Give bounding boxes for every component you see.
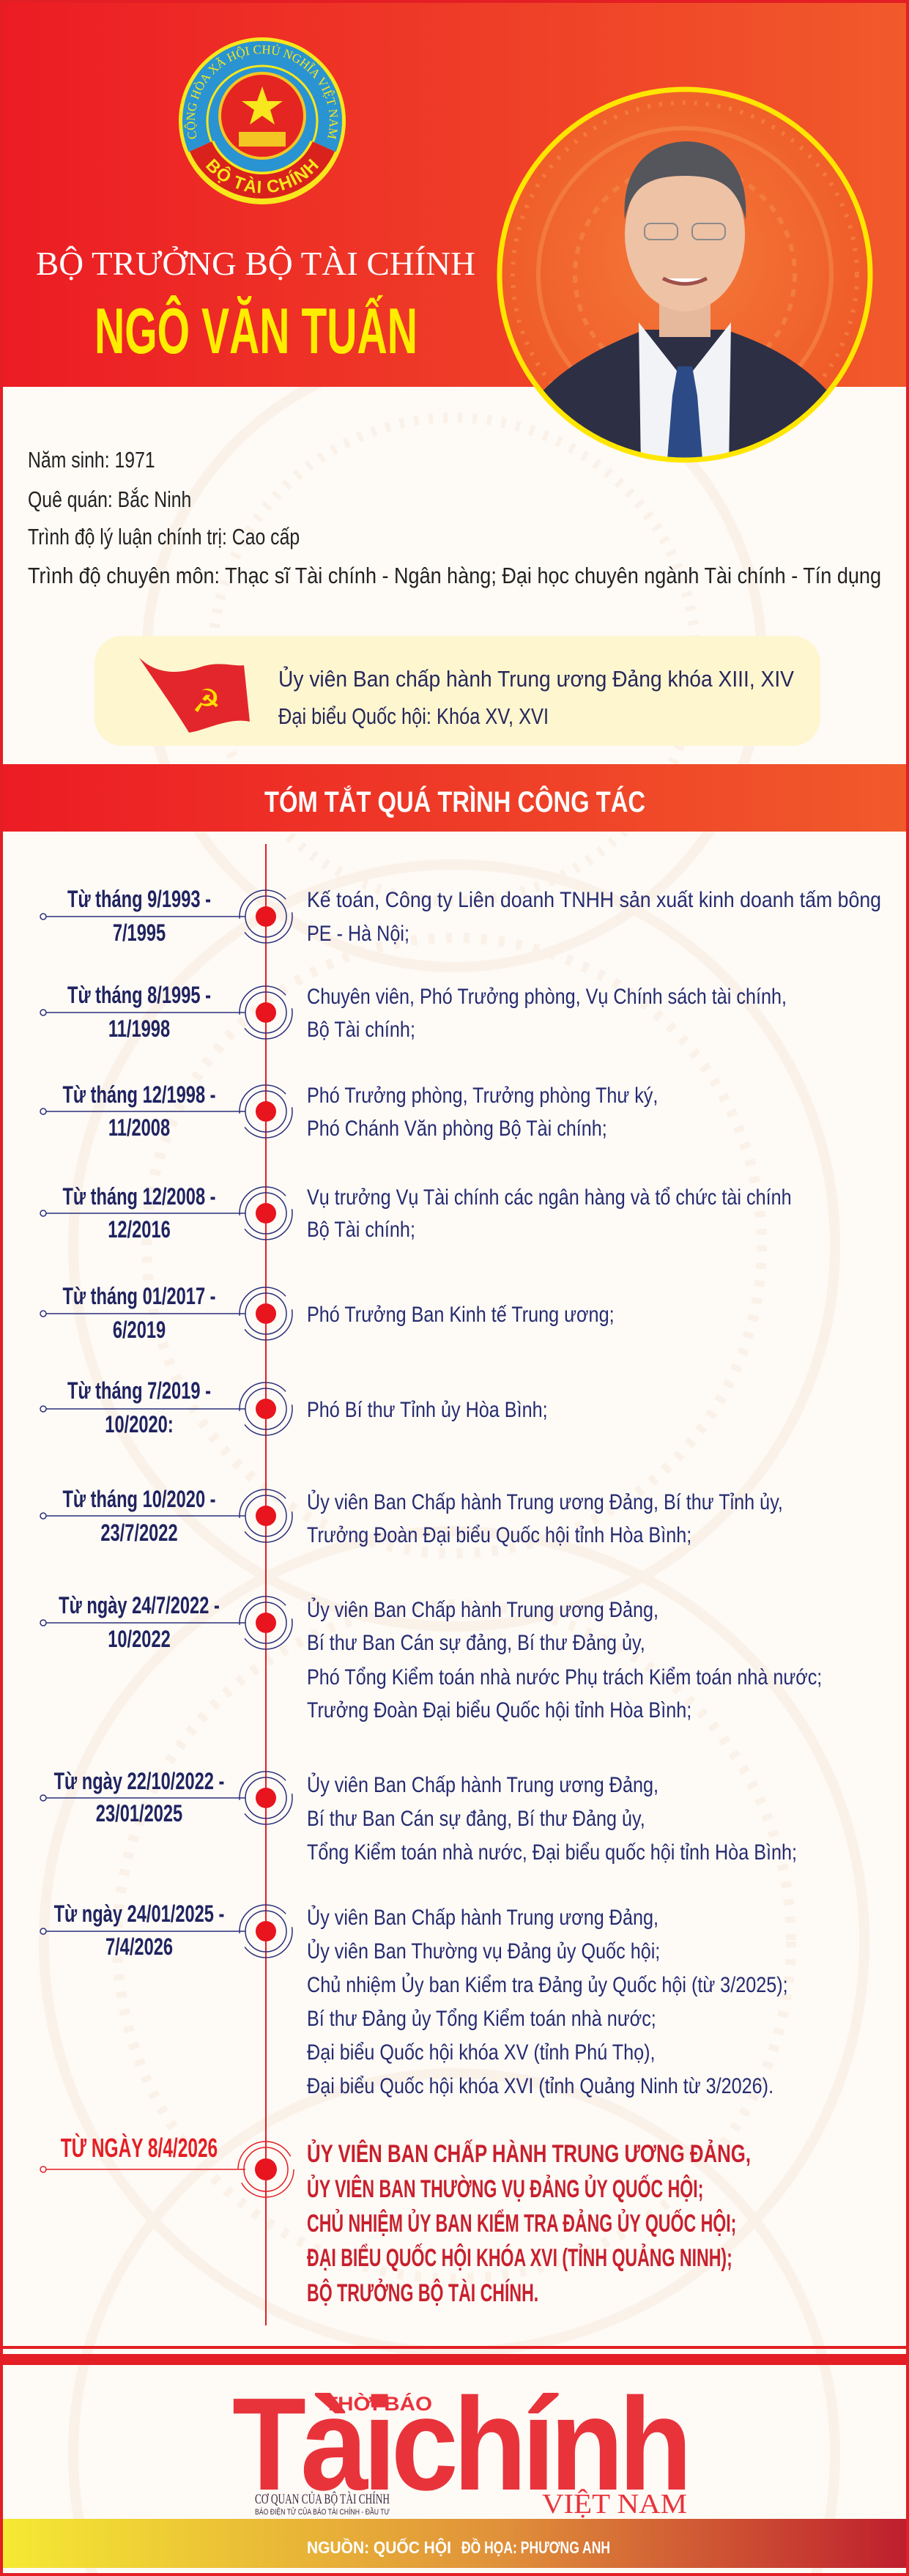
- entry 9: Tổng Kiểm toán nhà nước, Đại biểu quốc hội tỉnh Hòa Bình;: [307, 1840, 797, 1864]
- entry 1: [40, 887, 881, 946]
- entry 7: Trưởng Đoàn Đại biểu Quốc hội tỉnh Hòa Bình;: [307, 1522, 691, 1547]
- personal info: [28, 447, 881, 588]
- entry 1: Từ tháng 9/1993 -: [67, 887, 211, 912]
- entry 6: Từ tháng 7/2019 -: [67, 1378, 211, 1404]
- entry 2: Chuyên viên, Phó Trưởng phòng, Vụ Chính sách tài chính,: [307, 984, 787, 1008]
- entry 3: [40, 1082, 658, 1141]
- footer logo: Thoi bao Tai chinh Viet Nam: Tàichính: [232, 2371, 687, 2518]
- entry 3: 11/2008: [108, 1115, 170, 1141]
- entry 6: [40, 1378, 548, 1437]
- entry 10: Ủy viên Ban Thường vụ Đảng ủy Quốc hội;: [307, 1938, 660, 1963]
- logo: Bo Tai chinh emblem: [179, 37, 346, 204]
- entry 1: PE - Hà Nội;: [307, 921, 409, 945]
- entry 10: Đại biểu Quốc hội khóa XV (tỉnh Phú Thọ),: [307, 2040, 656, 2064]
- section heading band: [0, 764, 909, 832]
- entry 4: [40, 1184, 792, 1243]
- entry 10: [40, 1901, 788, 2098]
- entry 11: current position: ỦY VIÊN BAN CHẤP HÀNH TRUNG ƯƠNG ĐẢNG,: [307, 2140, 751, 2168]
- entry 8: [40, 1593, 822, 1722]
- entry 5: Phó Trưởng Ban Kinh tế Trung ương;: [307, 1302, 615, 1326]
- entry 8: Từ ngày 24/7/2022 -: [59, 1593, 220, 1618]
- entry 4: Từ tháng 12/2008 -: [62, 1184, 216, 1210]
- entry 10: Đại biểu Quốc hội khóa XVI (tỉnh Quảng Ninh từ 3/2026).: [307, 2073, 773, 2098]
- entry 9: Bí thư Ban Cán sự đảng, Bí thư Đảng ủy,: [307, 1806, 645, 1830]
- entry 10: Từ ngày 24/01/2025 -: [54, 1901, 224, 1927]
- title: BỘ TRƯỞNG BỘ TÀI CHÍNH: [36, 245, 475, 282]
- entry 10: Bí thư Đảng ủy Tổng Kiểm toán nhà nước;: [307, 2006, 656, 2030]
- entry 11: current position: [40, 2132, 751, 2307]
- entry 7: Ủy viên Ban Chấp hành Trung ương Đảng, Bí thư Tỉnh ủy,: [307, 1489, 783, 1514]
- credits bar: [0, 2519, 909, 2568]
- personal info: Quê quán: Bắc Ninh: [28, 486, 191, 512]
- entry 3: Từ tháng 12/1998 -: [62, 1082, 216, 1108]
- entry 3: Phó Chánh Văn phòng Bộ Tài chính;: [307, 1116, 607, 1140]
- header band: [0, 0, 909, 387]
- entry 11: current position: ĐẠI BIỂU QUỐC HỘI KHÓA XVI (TỈNH QUẢNG NINH);: [307, 2243, 732, 2272]
- entry 2: Từ tháng 8/1995 -: [67, 982, 211, 1008]
- entry 9: Ủy viên Ban Chấp hành Trung ương Đảng,: [307, 1772, 658, 1796]
- entry 8: Bí thư Ban Cán sự đảng, Bí thư Đảng ủy,: [307, 1630, 645, 1654]
- logo: Bo Tai chinh emblem: CỘNG HÒA XÃ HỘI CHỦ NGHĨA VIỆT NAM: [185, 44, 338, 139]
- entry 10: Ủy viên Ban Chấp hành Trung ương Đảng,: [307, 1904, 658, 1929]
- icon: party flag: [139, 658, 250, 733]
- entry 2: Bộ Tài chính;: [307, 1017, 415, 1041]
- entry 7: [40, 1487, 783, 1547]
- footer logo: Thoi bao Tai chinh Viet Nam: CƠ QUAN CỦA BỘ TÀI CHÍNH: [255, 2491, 390, 2507]
- entry 2: 11/1998: [108, 1016, 170, 1042]
- icon: party flag: ☭: [192, 684, 220, 719]
- footer logo: Thoi bao Tai chinh Viet Nam: BÁO ĐIỆN TỬ CỦA BÁO TÀI CHÍNH - ĐẦU TƯ: [255, 2507, 390, 2517]
- footer logo: Thoi bao Tai chinh Viet Nam: VIỆT NAM: [542, 2489, 687, 2520]
- entry 1: 7/1995: [113, 920, 166, 946]
- entry 5: 6/2019: [113, 1317, 166, 1343]
- entry 2: [40, 982, 787, 1042]
- credits bar: NGUỒN: QUỐC HỘI: [307, 2537, 451, 2557]
- entry 8: Trưởng Đoàn Đại biểu Quốc hội tỉnh Hòa Bình;: [307, 1698, 691, 1722]
- entry 11: current position: BỘ TRƯỞNG BỘ TÀI CHÍNH.: [307, 2278, 538, 2307]
- section heading band: TÓM TẮT QUÁ TRÌNH CÔNG TÁC: [264, 785, 645, 818]
- entry 10: 7/4/2026: [105, 1934, 173, 1960]
- personal info: Trình độ lý luận chính trị: Cao cấp: [28, 524, 300, 549]
- party box: [94, 636, 820, 746]
- entry 4: 12/2016: [108, 1217, 171, 1243]
- entry 9: 23/01/2025: [96, 1801, 182, 1826]
- entry 4: Vụ trưởng Vụ Tài chính các ngân hàng và tổ chức tài chính: [307, 1185, 792, 1209]
- logo: Bo Tai chinh emblem: BỘ TÀI CHÍNH: [205, 158, 319, 193]
- credits bar: ĐỒ HỌA: PHƯƠNG ANH: [461, 2537, 610, 2557]
- timeline entries: [40, 887, 881, 2307]
- entry 11: current position: CHỦ NHIỆM ỦY BAN KIỂM TRA ĐẢNG ỦY QUỐC HỘI;: [307, 2208, 736, 2238]
- timeline axis: [265, 844, 267, 2325]
- entry 7: 23/7/2022: [100, 1520, 178, 1546]
- footer divider: [0, 2346, 909, 2349]
- entry 8: 10/2022: [108, 1626, 171, 1652]
- entry 9: Từ ngày 22/10/2022 -: [54, 1769, 224, 1794]
- entry 10: Chủ nhiệm Ủy ban Kiểm tra Đảng ủy Quốc hội (từ 3/2025);: [307, 1972, 788, 1996]
- entry 4: Bộ Tài chính;: [307, 1217, 415, 1241]
- entry 8: Ủy viên Ban Chấp hành Trung ương Đảng,: [307, 1596, 658, 1621]
- entry 7: Từ tháng 10/2020 -: [62, 1487, 216, 1512]
- entry 8: Phó Tổng Kiểm toán nhà nước Phụ trách Kiểm toán nhà nước;: [307, 1665, 822, 1689]
- entry 6: Phó Bí thư Tỉnh ủy Hòa Bình;: [307, 1397, 548, 1421]
- entry 3: Phó Trưởng phòng, Trưởng phòng Thư ký,: [307, 1083, 658, 1107]
- footer logo: Thoi bao Tai chinh Viet Nam: THỜI BÁO: [324, 2392, 432, 2415]
- entry 9: [40, 1769, 797, 1864]
- entry 6: 10/2020:: [105, 1412, 174, 1437]
- entry 5: Từ tháng 01/2017 -: [62, 1284, 216, 1309]
- entry 5: [40, 1284, 615, 1343]
- party box: Ủy viên Ban chấp hành Trung ương Đảng khóa XIII, XIV: [278, 665, 794, 692]
- party box: Đại biểu Quốc hội: Khóa XV, XVI: [278, 704, 549, 730]
- name: NGÔ VĂN TUẤN: [94, 295, 418, 367]
- personal info: Năm sinh: 1971: [28, 447, 155, 473]
- entry 11: current position: TỪ NGÀY 8/4/2026: [61, 2132, 218, 2163]
- entry 11: current position: ỦY VIÊN BAN THƯỜNG VỤ ĐẢNG ỦY QUỐC HỘI;: [307, 2174, 703, 2203]
- portrait photo: [491, 81, 879, 469]
